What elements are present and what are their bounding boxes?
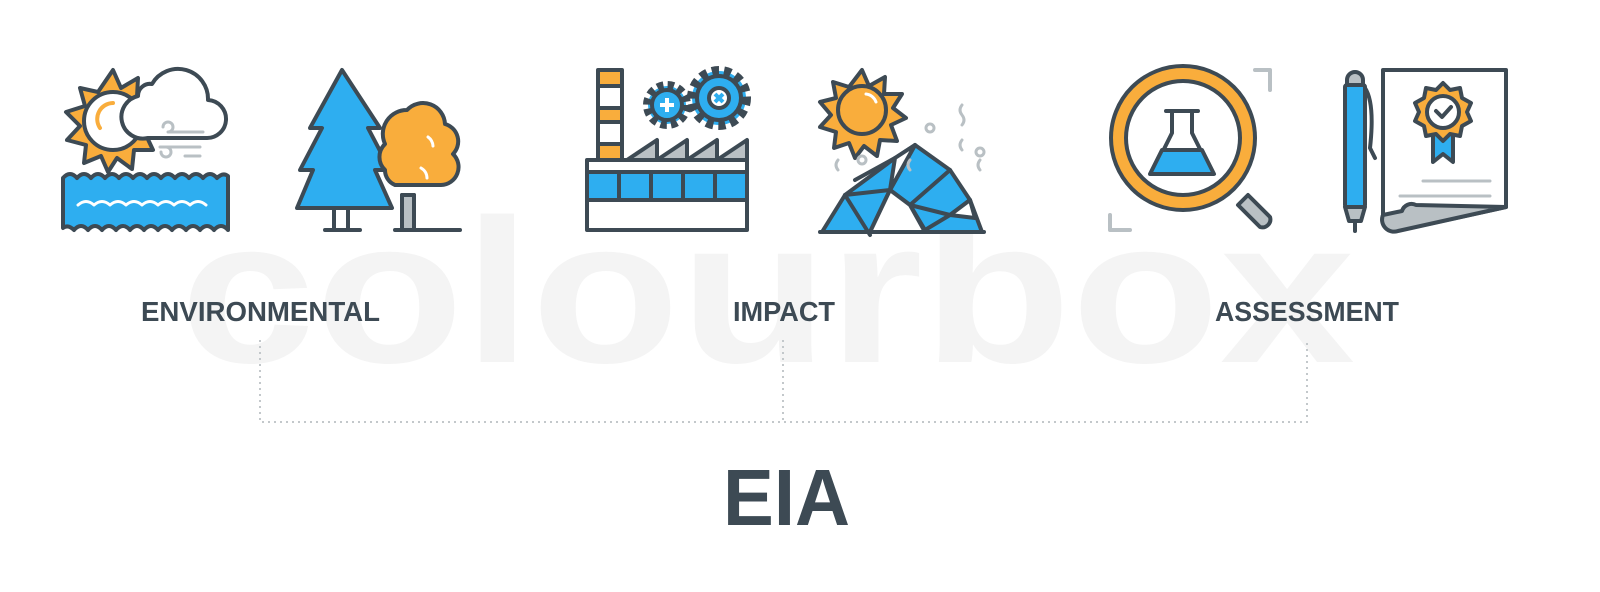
- icon: trees: [297, 70, 460, 230]
- icon: factory gears: [587, 70, 747, 230]
- icon: magnifier flask: [1110, 66, 1270, 230]
- label: ENVIRONMENTAL: ENVIRONMENTAL: [141, 296, 380, 327]
- watermark: colourbox: [180, 177, 1355, 406]
- icon: sun cloud water: [63, 69, 228, 230]
- connector lines: [260, 340, 1307, 422]
- title: EIA: EIA: [723, 453, 850, 542]
- icon: pen certificate: [1345, 70, 1506, 232]
- label: IMPACT: IMPACT: [733, 296, 835, 327]
- label: ASSESSMENT: ASSESSMENT: [1215, 296, 1399, 327]
- icon: sun iceberg: [820, 70, 984, 235]
